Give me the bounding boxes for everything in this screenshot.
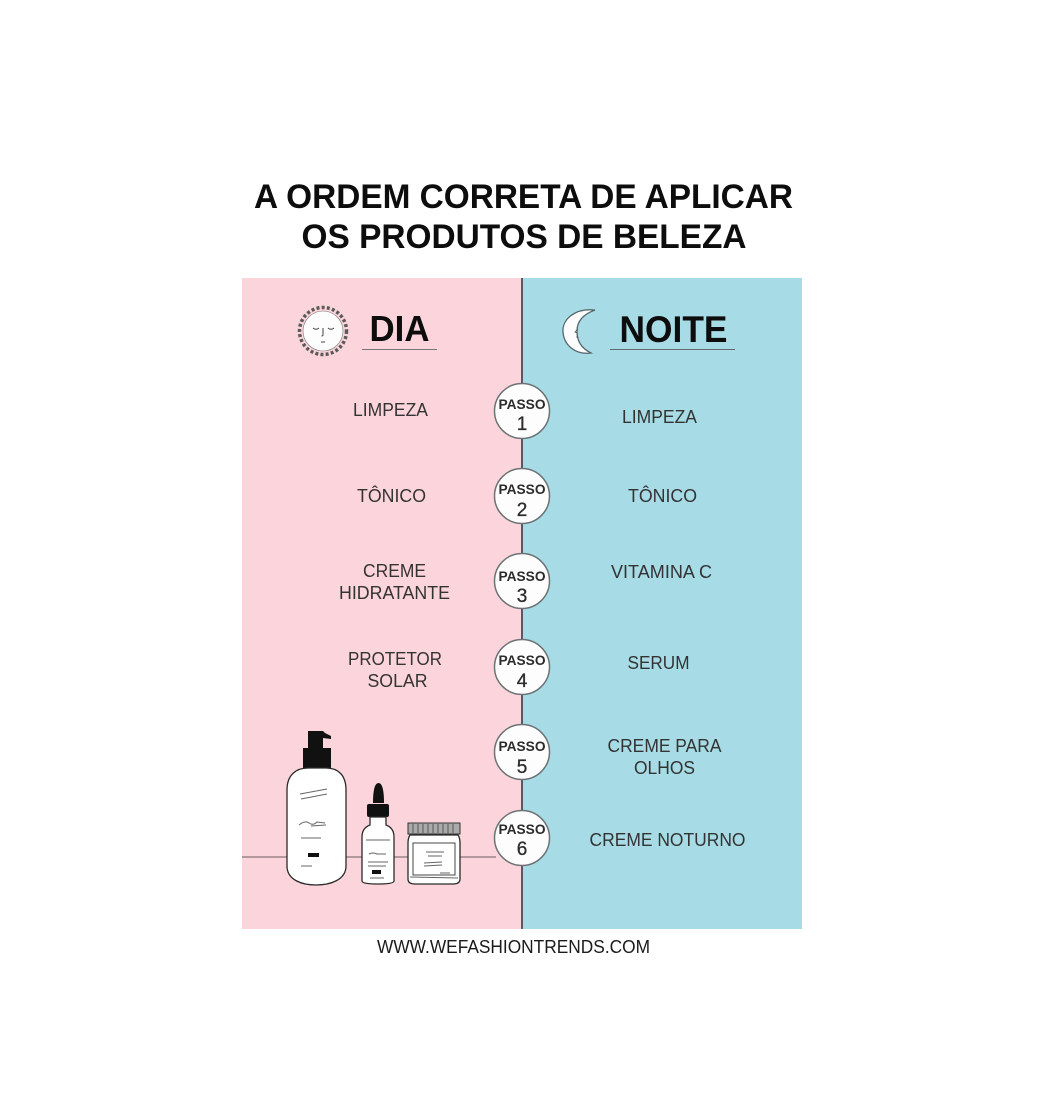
badge: passo 5: 5	[517, 757, 527, 778]
step label: serum: SERUM	[628, 653, 690, 673]
badge: passo 5	[494, 724, 550, 780]
footer url: WWW.WEFASHIONTRENDS.COM	[377, 936, 650, 957]
badge: passo 6: 6	[517, 839, 527, 860]
step label: creme hidratante: CREME	[363, 561, 426, 581]
heading: dia: DIA	[370, 308, 430, 349]
title	[254, 178, 793, 256]
badge: passo 1: PASSO	[498, 397, 546, 412]
badge: passo 4	[494, 640, 550, 694]
badge: passo 2: 2	[517, 500, 527, 521]
badge: passo 6: PASSO	[498, 822, 546, 837]
icon: moon	[563, 310, 595, 353]
night steps	[590, 407, 746, 850]
badge: passo 3: 3	[517, 586, 527, 607]
badge: passo 3	[494, 554, 550, 608]
badge: passo 6	[494, 810, 550, 866]
step label: protetor solar	[348, 649, 442, 691]
step label: creme hidratante: HIDRATANTE	[339, 583, 450, 603]
step label: creme para olhos	[608, 736, 722, 778]
panel: dia	[242, 278, 522, 929]
badge: passo 1	[494, 384, 550, 438]
badge: passo 4: PASSO	[498, 653, 546, 668]
badge: passo 5: PASSO	[498, 739, 546, 754]
title: OS PRODUTOS DE BELEZA	[302, 218, 746, 256]
step label: tonico: TÔNICO	[357, 485, 426, 506]
badge: passo 2: PASSO	[498, 482, 546, 497]
title: A ORDEM CORRETA DE APLICAR	[254, 178, 793, 216]
icon: pump bottle	[287, 731, 346, 885]
step label: protetor solar: SOLAR	[368, 671, 428, 691]
step label: creme noturno: CREME NOTURNO	[590, 830, 746, 850]
step label: creme hidratante	[339, 561, 450, 603]
step label: vitamina c: VITAMINA C	[611, 562, 712, 582]
badge: passo 4: 4	[517, 671, 528, 692]
badge: passo 1: 1	[517, 414, 527, 435]
badge: passo 3: PASSO	[498, 569, 546, 584]
badge: passo 2	[494, 468, 550, 524]
step label: limpeza: LIMPEZA	[622, 407, 697, 427]
day steps	[339, 400, 450, 691]
step label: creme para olhos: CREME PARA	[608, 736, 722, 756]
panel: noite	[522, 278, 802, 929]
step label: tonico: TÔNICO	[628, 485, 697, 506]
icon: sun	[300, 308, 346, 354]
icon: dropper bottle	[362, 783, 394, 884]
step label: creme para olhos: OLHOS	[634, 758, 695, 778]
step label: limpeza: LIMPEZA	[353, 400, 428, 420]
icon: cream jar	[408, 823, 460, 884]
heading: noite: NOITE	[620, 309, 728, 350]
step label: protetor solar: PROTETOR	[348, 649, 442, 669]
